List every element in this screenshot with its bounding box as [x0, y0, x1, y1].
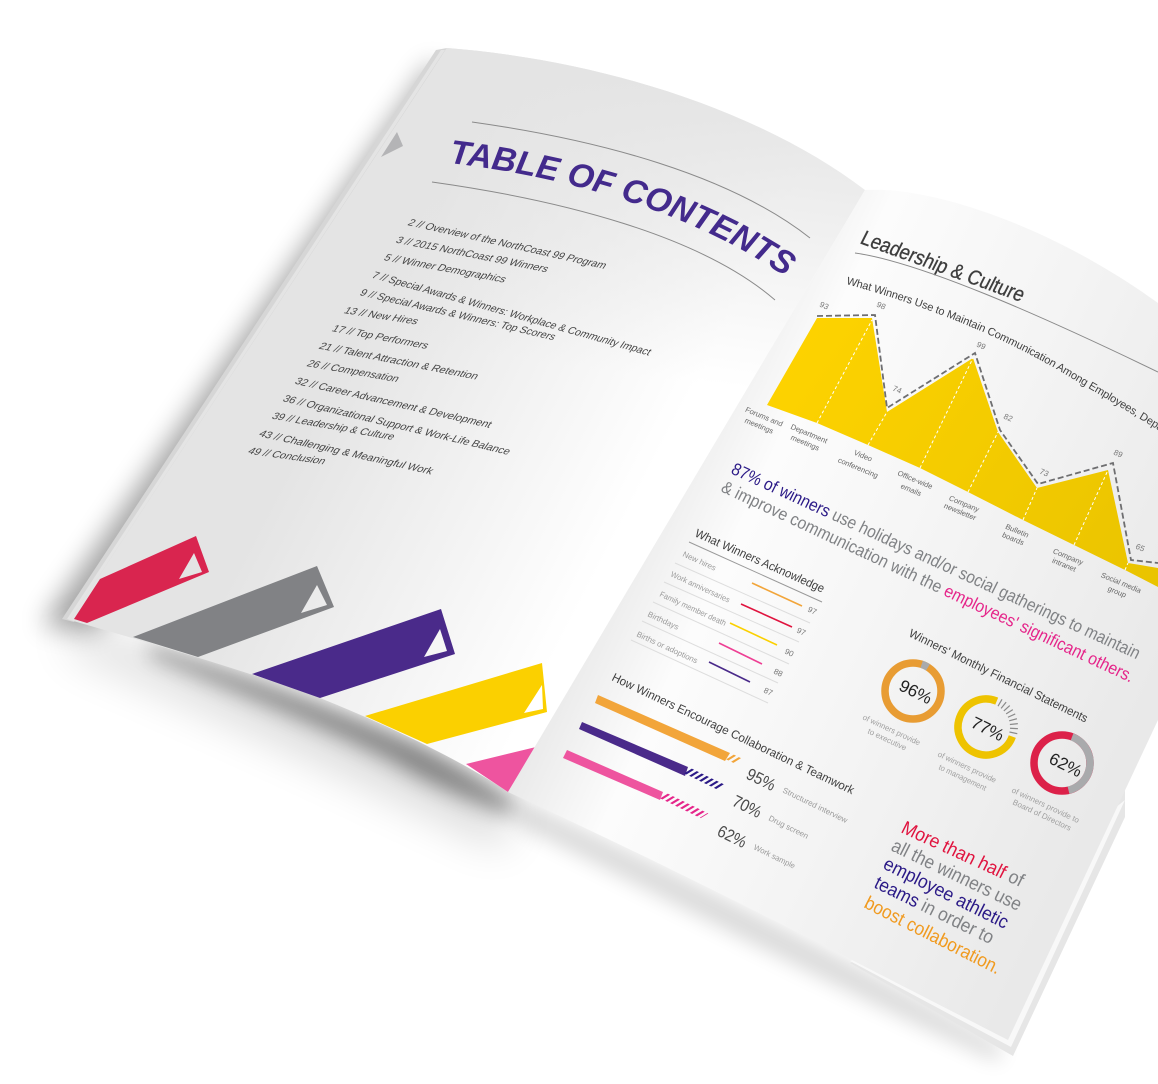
callout: more than half: More than half of: [898, 818, 1028, 892]
donut: 77 percent to management: [936, 691, 1022, 793]
data values: 74: [891, 384, 904, 396]
category labels: Company: [1051, 547, 1085, 567]
category labels: Forums and: [744, 405, 785, 428]
panel: right page: [508, 190, 1158, 1040]
table of contents list: 32 // Career Advancement & Development: [292, 376, 494, 430]
category labels: conferencing: [836, 456, 880, 480]
category labels: newsletter: [942, 501, 978, 522]
bar values: 90: [783, 647, 796, 659]
category labels: emails: [899, 482, 923, 498]
donut: 96 percent to executive: to executive: [866, 727, 908, 753]
bar: work sample 62 percent: Work sample: [752, 843, 797, 871]
title rules: [432, 122, 810, 300]
table of contents list: 39 // Leadership & Culture: [269, 411, 397, 442]
data values: [818, 300, 1147, 554]
book spine edge strips: [62, 48, 447, 622]
table of contents list: 13 // New Hires: [341, 306, 422, 327]
bar: work sample 62 percent: [563, 750, 797, 871]
callout: more than half: employee athletic: [880, 854, 1012, 934]
row labels: Births or adoptions: [635, 630, 699, 665]
category labels: Office-wide: [896, 469, 934, 491]
panel: monthly financial statements: Winners' Monthly Financial Statements: [907, 626, 1090, 725]
category labels: Department: [789, 422, 830, 446]
table of contents list: [245, 218, 654, 477]
heading: leadership and culture: Leadership & Culture: [857, 227, 1029, 306]
table of contents list: 26 // Compensation: [304, 359, 402, 384]
line bars: [709, 583, 802, 682]
row labels: [635, 550, 731, 665]
heading: leadership and culture: [855, 227, 1158, 372]
table of contents list: 7 // Special Awards & Winners: Workplace & Community Impact: [369, 270, 654, 358]
category labels: Company: [947, 494, 981, 514]
bar values: [762, 605, 819, 698]
data values: 93: [818, 300, 831, 312]
panel: what winners acknowledge: [631, 526, 827, 703]
panel: monthly financial statements: [861, 626, 1098, 833]
callout: more than half: all the winners use: [888, 836, 1025, 916]
data values: 65: [1134, 542, 1147, 554]
bar: work sample 62 percent: 62%: [714, 822, 750, 852]
data values: 73: [1038, 467, 1051, 479]
bar values: 87: [762, 686, 775, 698]
bar: drug screen 70 percent: Drug screen: [767, 814, 810, 841]
rules: [689, 542, 822, 602]
category labels: [743, 405, 1144, 599]
bar values: 97: [795, 626, 808, 638]
category labels: boards: [1001, 530, 1026, 547]
bar: structured interview 95 percent: [595, 695, 849, 825]
donut: 62 percent to board of directors: [1010, 727, 1098, 833]
area chart: communication methods: [743, 300, 1158, 599]
row labels: New hires: [681, 550, 717, 573]
table of contents list: 5 // Winner Demographics: [381, 253, 509, 285]
category labels: Bulletin: [1004, 522, 1030, 539]
donut: 96 percent to executive: 96%: [896, 676, 935, 708]
bar: drug screen 70 percent: [579, 722, 810, 841]
donut: 77 percent to management: 77%: [968, 713, 1007, 745]
bar: structured interview 95 percent: Structured interview: [781, 786, 849, 825]
donut: 62 percent to board of directors: Board of Directors: [1011, 798, 1073, 833]
table of contents list: 2 // Overview of the NorthCoast 99 Program: [405, 218, 609, 271]
category labels: Social media: [1099, 571, 1144, 595]
table of contents list: 17 // Top Performers: [329, 324, 432, 351]
callout: more than half: boost collaboration.: [861, 893, 1004, 979]
bar: drug screen 70 percent: 70%: [729, 792, 765, 822]
table of contents list: 3 // 2015 NorthCoast 99 Winners: [393, 235, 552, 275]
data values: 89: [1112, 448, 1125, 460]
table of contents list: 43 // Challenging & Meaningful Work: [256, 429, 436, 477]
table of contents list: 21 // Talent Attraction & Retention: [316, 341, 481, 382]
callout: 87 percent of winners: & improve communication with the employees' significant others.: [718, 477, 1138, 686]
donut: 77 percent to management: to management: [937, 763, 989, 793]
donut: 96 percent to executive: [861, 656, 948, 753]
panel: left page: [70, 48, 865, 792]
book drop shadow: [42, 62, 1000, 1062]
donut: 62 percent to board of directors: of winners provide to: [1010, 786, 1081, 825]
bar values: 88: [772, 667, 785, 679]
category labels: intranet: [1051, 556, 1079, 574]
category labels: meetings: [743, 416, 775, 436]
title: table of contents: TABLE OF CONTENTS: [454, 140, 796, 273]
category labels: meetings: [789, 433, 821, 453]
icon: corner fold tab: [381, 132, 403, 157]
table of contents list: 9 // Special Awards & Winners: Top Scorers: [357, 288, 559, 343]
table of contents list: 49 // Conclusion: [245, 446, 328, 467]
book right edge strips: [850, 790, 1125, 1056]
decorative colour tabs: [74, 536, 547, 792]
callout: more than half: [861, 818, 1028, 979]
row labels: Birthdays: [646, 610, 680, 632]
data values: 99: [975, 340, 988, 352]
donut: 62 percent to board of directors: 62%: [1046, 749, 1085, 781]
bar values: 97: [806, 605, 819, 617]
table of contents list: 36 // Organizational Support & Work-Life Balance: [280, 394, 513, 457]
donut: 77 percent to management: of winners provide: [936, 750, 998, 785]
panel: how winners encourage collaboration: [563, 670, 858, 871]
row labels: Family member death: [658, 590, 728, 628]
bar: structured interview 95 percent: 95%: [743, 765, 779, 795]
callout: more than half: teams in order to: [871, 873, 997, 949]
data values: 98: [875, 300, 888, 312]
panel: how winners encourage collaboration: How Winners Encourage Collaboration & Teamwork: [610, 670, 858, 797]
category labels: Video: [852, 448, 874, 463]
data values: 82: [1002, 412, 1015, 424]
panel: what winners acknowledge: What Winners Acknowledge: [693, 526, 827, 596]
donut: 96 percent to executive: of winners provide: [861, 713, 922, 747]
row labels: Work anniversaries: [669, 570, 731, 604]
category labels: group: [1106, 584, 1128, 599]
